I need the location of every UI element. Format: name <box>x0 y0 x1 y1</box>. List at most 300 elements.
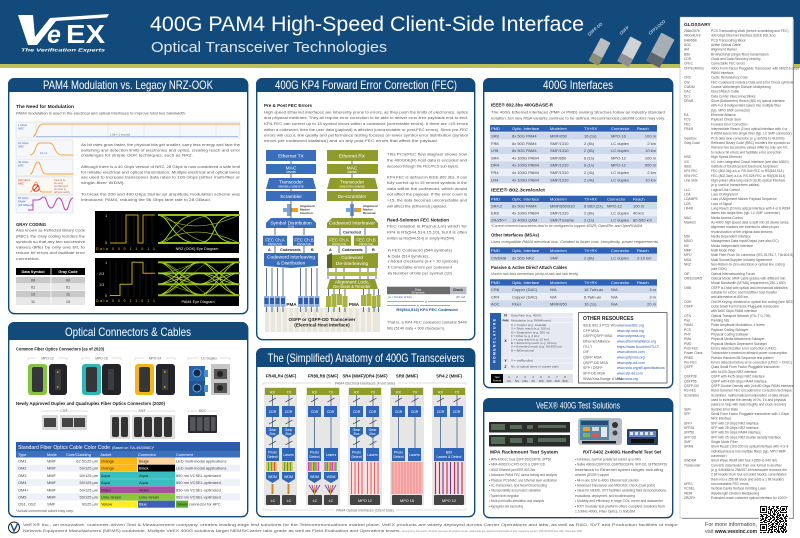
table: fiber optics cable color code: Connector <box>138 452 157 457</box>
glossary definitions: that any two successive values differ by only one bit, <box>711 146 788 150</box>
diagram: RX flow: Alignment Lock, <box>335 280 369 286</box>
table: 802.3cm/cn/ct interfaces: 100 m <box>633 204 645 208</box>
table: 802.3bs interfaces: SMF/1310 <box>550 163 569 168</box>
glossary terms: I2C <box>684 160 690 164</box>
glossary definitions: 2 bit header from four encoded blocks, consolidates <box>711 473 787 477</box>
table: fiber optics cable color code: MMF <box>47 458 56 464</box>
text: flow description: will affect the (Ethernet) payload. <box>387 203 447 208</box>
footnote: *Actual commercial colors may vary. <box>16 509 74 513</box>
column labels <box>266 374 462 378</box>
transceiver column: FR8/LR8: LC <box>313 499 318 503</box>
nomenclature example strip: 5 <box>540 375 542 379</box>
chart: bit rate waveforms: Cannot be <box>54 179 66 182</box>
label: electrical interfaces: PAM4 Electrical Interfaces (Front Side) <box>335 382 395 386</box>
list: RXT features: 1.5 MHz-400G, Fiber Optics, G.fin/DSM <box>575 510 635 514</box>
glossary definitions: Wavelength Division Multiplexing <box>711 491 759 495</box>
list: MPA features: • Multi-port traffic simulation and analysis <box>489 499 544 503</box>
table: direct attach cables: PMD <box>491 280 500 285</box>
table: 802.3bs interfaces: 2 (4λ) <box>584 170 595 175</box>
diagram: TX flow: Symbol Distribution <box>270 220 312 226</box>
glossary terms: AOC <box>684 43 692 47</box>
table: gray code <box>16 268 85 305</box>
table: 802.3bs interfaces: 2 km <box>647 170 657 175</box>
table: direct attach cables: N/A <box>550 294 557 299</box>
chart: bit rate waveforms: too slow to <box>54 188 67 191</box>
glossary terms: QSFP-DD <box>684 384 699 388</box>
transceiver column: SR8: MPO 16 <box>400 499 414 503</box>
table: 802.3cm/cn/ct interfaces: SMF/1310 <box>550 210 569 216</box>
transceiver column: SR4.2: CDR <box>453 410 461 414</box>
transceiver column: SR4/DR4 <box>348 387 382 505</box>
glossary definitions: PAM4 Interface <box>711 71 734 75</box>
glossary terms: PRBS <box>684 356 694 360</box>
glossary terms: DCI <box>684 94 690 98</box>
table: 802.3bs interfaces: FR4 <box>491 170 499 175</box>
table: gray code: 10 <box>66 300 70 304</box>
glossary terms: Post-FEC <box>684 347 699 351</box>
glossary terms: LLC <box>684 188 691 192</box>
diagram: TX flow: Codewords <box>280 248 301 252</box>
chart: bit rate waveforms: 40 Gbps <box>18 160 29 164</box>
glossary terms: 400GAUI-8 <box>684 34 701 38</box>
glossary definitions: Modal Bandwidth (MTMA) requirement (250-1,600) <box>711 281 786 285</box>
table: 802.3bs interfaces: 8x 50G PAM4 <box>512 148 537 153</box>
text: explanation of bit rates: are used to increase transceiver data rates to 100 Gbps (either multi-fiber or <box>81 175 241 180</box>
text: flow description <box>387 152 468 208</box>
glossary terms: Line Side <box>684 178 698 182</box>
glossary definitions: Payload Coding Sublayer <box>711 328 749 332</box>
transceiver column: SR4/DR4: RX <box>354 390 360 394</box>
other resources box: www.ieee802.org <box>617 324 644 328</box>
image: MPA rackmount units <box>489 422 570 446</box>
table: direct attach cables: MMF/850 <box>550 302 568 307</box>
connector: MPO-24 <box>135 356 175 395</box>
glossary definitions: Optical Internetworking Forum <box>711 272 755 276</box>
nomenclature box: S = Short reach (e.g. 100 m) <box>511 327 550 331</box>
text: explanation of bit rates: single-fiber WDM). <box>81 180 125 185</box>
chart: bit rate waveforms <box>16 122 240 213</box>
nomenclature example strip: 10G <box>522 379 529 383</box>
glossary terms: FEC <box>684 122 691 126</box>
table: 802.3cm/cn/ct interfaces: Reach <box>633 196 645 202</box>
transceiver column: FR4/LR4: LC <box>287 499 292 503</box>
glossary definitions: Long Reach (10 km) optical interface with 4 or 8 WDM <box>711 206 790 210</box>
text: company statement: Acronyms in this poster. All rights reserved. All product names, trademarks are registered trademarks of their respective owners. D05-00-054P Rev. A00, November 2020 <box>402 529 582 533</box>
transceiver column: FR8/LR8: LC <box>329 499 334 503</box>
table: direct attach cables: AOC <box>491 302 500 307</box>
chart: PAM4 eye diagram: 0 <box>105 294 107 298</box>
table: fiber optics cable color code: Aqua <box>101 473 111 478</box>
glossary terms: CW <box>684 80 690 84</box>
other resources box: www.qsfp-dd.com <box>617 361 645 365</box>
transceiver column: FR4/LR4: Lasers <box>283 453 294 457</box>
table: 802.3bs interfaces: 100 m <box>645 155 657 160</box>
table: fiber optics cable color code: Mode <box>47 452 57 457</box>
glossary terms: MDI <box>684 234 690 238</box>
diagram: transceiver host interface background <box>265 308 380 332</box>
table: fiber optics cable color code: MMF <box>47 480 56 485</box>
transceiver column: SR8: CDR <box>411 410 419 414</box>
subheading: 802.3bs <box>491 102 665 120</box>
transceiver column: FR4/LR4: TX <box>287 390 292 394</box>
glossary terms: QSFP <box>684 365 694 369</box>
chart: NRZ eye diagram <box>95 211 240 253</box>
glossary terms: LOA <box>684 192 691 196</box>
connector: MPO-16 <box>82 356 121 395</box>
nomenclature example strip: 7 <box>556 375 558 379</box>
nomenclature example strip: 5G <box>515 379 520 383</box>
table: 802.3bs interfaces: PMD <box>491 126 500 131</box>
diagram: TX flow: A <box>268 248 271 252</box>
panel: 400G KP4 forward error correction <box>256 78 475 340</box>
table: 802.3cm/cn/ct interfaces: MMF/850/910 <box>550 204 575 208</box>
table: direct attach cables: 16 (1λ) <box>584 302 597 307</box>
list: RXT features: evaluations, deployment, and troubleshooting <box>575 494 635 498</box>
glossary definitions: FEC Codeword; includes Data and Error Check symbols <box>711 80 794 84</box>
table: gray code: 11 <box>31 300 35 304</box>
glossary terms: Gearbox <box>684 136 697 140</box>
glossary definitions: (e.g. 64b/66b to 256/257-bit transcoder removes the <box>711 468 787 472</box>
connector: MPO-16: MPO-16 <box>95 356 108 360</box>
diagram: RX flow: De-interleaving <box>336 261 368 267</box>
glossary definitions: Single Mode Fiber <box>711 440 739 444</box>
connector: MDC: MDC <box>199 409 207 413</box>
image: RXT-6402 handheld test set <box>578 418 622 445</box>
diagram: RX flow: A <box>329 248 332 252</box>
glossary definitions: Extended-reach coherent optical interface for 100G+ <box>711 496 788 500</box>
text: Reed-Solomon FEC notation: FEC notation is RS(n,k,t,m) which for <box>387 223 468 228</box>
table: other interfaces <box>490 247 657 261</box>
glossary definitions: connector) <box>711 454 727 458</box>
glossary terms: CDR <box>684 57 692 61</box>
text: pre and post FEC errors <box>264 103 468 143</box>
heading: GLOSSARY <box>684 22 712 28</box>
list: MPA features: • Advanced PAM4 FEC stress testing and analysis <box>489 473 557 477</box>
text: pre and post FEC errors: High speed Ethernet interfaces are inherently prone to errors, as they push the limits of electronics, optics <box>264 109 468 114</box>
table: 802.3bs interfaces: Optic. Interface <box>512 126 540 131</box>
table: 802.3cm/cn/ct interfaces: PMD <box>491 196 500 202</box>
connector: LC duplex: LC-Duplex <box>201 356 217 360</box>
glossary terms: Power Class <box>684 351 703 355</box>
table: 802.3bs interfaces: FR8 <box>491 141 499 146</box>
nomenclature box: NOMENCLATURE <box>492 318 496 363</box>
text: explanation of bit rates: Although there is a 40 Gbps version of NRZ, 28 Gbps is now considered a safe limit <box>81 164 241 169</box>
glossary terms: EA <box>684 113 689 117</box>
glossary terms: ZR/ZR+ <box>684 496 696 500</box>
glossary terms: Gray Code <box>684 141 700 145</box>
column labels: SR4.2 (MMF) <box>436 374 462 378</box>
text: gray coding: values differ by only one bit, to <box>16 244 86 250</box>
glossary terms: BiDi <box>684 52 690 56</box>
transceiver photos: QSFP-DD <box>586 21 604 37</box>
glossary definitions: FEC (802.3bj) a.k.a. RS-544 FEC or RS(544,514) <box>711 169 784 173</box>
chart: bit rate waveforms: 0.1 ns <box>40 151 48 155</box>
table: 802.3cm/cn/ct interfaces: 40 km <box>633 210 645 216</box>
nomenclature box: F = Fiber (e.g. 2 km) <box>511 334 539 338</box>
table: fiber optics cable color code: 850 nm VCSEL-optimized <box>176 473 221 478</box>
diagram: RS(544,514) codeword: 514 symbols <box>412 292 425 294</box>
diagram: RX flow <box>326 150 380 312</box>
text: flow description: fully correct up to 15 errored symbols in the <box>387 180 468 185</box>
nomenclature box: E = Extra long reach (e.g. 40 km) <box>511 341 556 345</box>
table: other interfaces: LC duplex <box>611 255 629 260</box>
table: fiber optics cable color code: MMF <box>47 487 56 492</box>
table: other interfaces: 2-10 km <box>637 255 652 260</box>
table: fiber optics cable color code: 50/125 µm <box>80 473 98 478</box>
logo: VeEX <box>18 14 109 52</box>
diagram: TX flow <box>263 150 320 312</box>
glossary definitions: Optical Mode: MMF cable grades with different min. <box>711 277 786 281</box>
glossary terms: CFP8 (400G) <box>684 66 704 70</box>
glossary definitions: and alternative at 800 km <box>711 295 748 299</box>
diagram: RS(544,514) codeword: k <box>417 304 419 308</box>
table: 802.3bs interfaces: 8 (1λ) <box>584 163 595 168</box>
nomenclature example strip: 2G <box>507 379 512 383</box>
list: MPA features: • MPA-400DCO-CFP2-DCO & QSFP-DD <box>489 463 545 467</box>
glossary definitions: with 4x100 Gbps NRZ interface <box>711 370 757 374</box>
nomenclature box: No. of optical lanes or copper pairs <box>511 364 559 368</box>
glossary terms: KR4 FEC <box>684 174 699 178</box>
other resources box: OIF <box>583 350 590 354</box>
table: 802.3bs interfaces: TX+RX <box>584 126 597 131</box>
table: other interfaces: SMF <box>550 255 559 260</box>
transceiver column: SR8: Detect <box>393 455 404 459</box>
text: flow description: This PCS/FEC flow diagram shows how <box>387 152 467 157</box>
table: 802.3cm/cn/ct interfaces: ER8 <box>491 210 500 216</box>
table: fiber optics cable color code: 62.5/125 µm <box>76 458 98 464</box>
diagram: RX flow: Removal <box>363 211 376 215</box>
glossary definitions: QSFP with 4x50 Gbps PAM4 interface <box>711 379 767 383</box>
table: direct attach cables: Fiber <box>512 302 522 307</box>
glossary definitions: PCS Transcoding Block <box>711 38 746 42</box>
list: RXT features: • All-in-one 10M to 400G Ethernet test solution <box>575 478 639 482</box>
glossary definitions: QSFP Double Density with 2x4x50 Gbps PAM4 interface <box>711 384 794 388</box>
caption: RXT handheld: RXT-6402 2x400G Handheld Test Set <box>583 450 661 456</box>
table: direct attach cables: N/A <box>611 294 618 299</box>
diagram: TX flow: FEC Ch.B <box>294 238 314 242</box>
chart: bit rate waveforms: 1 Gbps <box>18 123 28 127</box>
table: fiber optics cable color code: Green <box>177 502 188 507</box>
other resources box: www.snia.org <box>617 377 638 381</box>
transceiver column: FR8/LR8: CDR <box>311 410 319 414</box>
glossary definitions: (e.g. used in transceivers cables) <box>711 183 759 187</box>
glossary definitions: NRZ interface <box>711 417 732 421</box>
table: direct attach cables: 20 m <box>647 302 657 307</box>
text: flow description: data within the codeword, which would <box>387 186 467 191</box>
subheading: newly approved connectors: Newly Approved Duplex and Quadruplex Fiber Optics Connectors (2020) <box>16 401 165 406</box>
chart: bit rate waveforms: NRZ <box>18 144 24 148</box>
diagram: RS(544,514) codeword: (m = Number of bits) <box>388 295 412 299</box>
connector: SN: SN® <box>138 409 146 413</box>
glossary definitions: SFP with 25 Gbps NRZ interface <box>711 426 759 430</box>
table: 802.3cm/cn/ct interfaces: 2 (8λ) <box>584 210 595 216</box>
other resources box: SFP / DSFP <box>583 366 603 370</box>
text: pre and post FEC errors: within a codeword, then the user data (payload) is affected (uncorrectable or post-FEC errors). Since pre-FEC <box>264 127 468 132</box>
table: direct attach cables: Copper (DAC) <box>512 287 538 292</box>
table: 802.3bs interfaces: 8x 50G PAM4 <box>512 134 537 138</box>
table: fiber optics cable color code: LED multi-modal applications <box>176 466 226 471</box>
chart: NRZ eye diagram: 0 <box>105 240 108 245</box>
label: optical interfaces <box>263 507 466 512</box>
nomenclature box: Data Rate (e.g. 400G) <box>511 313 541 317</box>
table: 802.3cm/cn/ct interfaces: LC duplex <box>611 218 629 222</box>
glossary terms: Transcoder <box>684 463 701 467</box>
table: fiber optics cable color code: Type <box>18 452 26 457</box>
transceiver column: SR4.2: RX <box>438 390 444 394</box>
table: fiber optics cable color code: 850 nm VCSEL-optimized <box>176 487 221 492</box>
list: MPA features: • IC, transceiver, and Near/Cloud testing <box>489 484 547 488</box>
glossary terms: PMA <box>684 337 692 341</box>
list: RXT features: • Native 400GE/QSFP-DD, QSFP56/OSFP4, SFP-DD, SFP56/SFP28 <box>575 463 667 467</box>
other resources box: ITU-T <box>583 345 593 349</box>
table: direct attach cables: TX+RX <box>584 280 597 285</box>
transceiver column: FR4/LR4: LC <box>271 499 276 503</box>
table: fiber optics cable color code: LED multi-modal applications <box>176 458 226 464</box>
other resources box: www.ethernetalliance.org <box>617 340 656 344</box>
transceiver column: FR8/LR8: Photo <box>310 450 319 454</box>
chart: bit rate waveforms: 10 Gbps <box>18 141 29 145</box>
text: pre and post FEC errors: KP4-FEC can correct up to 15 symbol errors within a codeword (correctable errors). If there are >15 errors <box>264 121 468 126</box>
label: optical interfaces: PAM4 Optical Interfaces (Client Side) <box>336 508 394 512</box>
nomenclature box: V = via/Bundled <box>511 358 533 362</box>
table: fiber optics cable color code: (Based on TIA-492/598C)* <box>112 446 155 450</box>
table: 802.3bs interfaces: 4x 100G PAM4 <box>512 177 540 182</box>
table: 802.3bs interfaces: SMF/1310 <box>550 170 569 175</box>
glossary terms: PMD <box>684 342 692 346</box>
chart: PAM4 eye diagram <box>95 258 240 306</box>
glossary definitions: Quad Small Form Factor Pluggable transceiver <box>711 365 781 369</box>
table: fiber optics cable color code: Beige <box>139 458 149 464</box>
text: explanation of bit rates: switching and detection limits of electronics and optics, creating reach and error <box>81 147 241 152</box>
text: Reed-Solomon FEC notation: Reed-Solomon FEC Notation <box>387 218 449 222</box>
connector: SN <box>110 409 175 439</box>
table: 802.3cm/cn/ct interfaces: 4x 100G PAM4 <box>512 210 540 216</box>
table: fiber optics cable color code: Orange <box>101 458 114 464</box>
table: fiber optics cable color code: Standard Fiber Optics Cable Color Code <box>18 445 110 451</box>
table: fiber optics cable color code: Orange <box>101 466 114 471</box>
nomenclature box: Z = Extended reach (e.g. 80-500 km) <box>511 345 562 349</box>
diagram: RS(544,514) codeword: (30, sw) <box>456 295 465 299</box>
glossary terms: MII <box>684 244 689 248</box>
connector: MPO-24: MPO-24 <box>149 356 161 360</box>
table: fiber optics cable color code: Blue <box>139 502 147 507</box>
other resources box: www.snia.org/sff-specifications <box>617 366 665 370</box>
diagram: TX flow: RS(544,514) <box>297 243 311 246</box>
subheading: 802.3bs: IEEE® 802.3bs 400GBASE-R <box>491 102 554 108</box>
diagram: RX flow: B <box>372 248 375 252</box>
nomenclature box <box>490 313 573 370</box>
text: Reed-Solomon FEC notation: k Data (514 symbols) <box>388 253 429 258</box>
heading: 400G Interfaces <box>543 78 613 92</box>
diagram: RS(544,514) codeword: Check <box>453 288 463 292</box>
glossary terms: PHY <box>684 333 692 337</box>
nomenclature box: C = Copper (e.g. Coaxial) <box>511 323 546 327</box>
text: explanation of bit rates <box>81 142 241 202</box>
table: 802.3cm/cn/ct interfaces: 8x 50G PAM4 <box>512 204 537 208</box>
table: fiber optics cable color code: Aqua <box>139 473 149 478</box>
nomenclature example strip: 1 <box>508 375 510 379</box>
other resources box: SFP-DD MSA <box>583 372 606 376</box>
transceiver column: SR4/DR4: Detect <box>351 455 362 459</box>
text: codeword size: bits (5140 data + 300 checksum). <box>387 325 445 330</box>
glossary terms: SER <box>684 407 691 411</box>
nomenclature example strip: Year <box>494 375 500 379</box>
diagram: RX flow: FEC Ch.B <box>356 238 376 242</box>
glossary terms: OM5 <box>684 286 691 290</box>
glossary definitions: Coarse Wavelength Division Multiplexing <box>711 85 771 89</box>
transceiver column: SR4/DR4: CDR <box>353 410 361 414</box>
glossary definitions: Alignment Marker <box>711 48 738 52</box>
connector: MDC <box>188 409 217 433</box>
text: flow description: KP4 FEC is defined in IEEE 802.3bs. It can <box>387 174 467 179</box>
glossary definitions: Uncorrectable FEC errors <box>711 482 749 486</box>
chart: PAM4 eye diagram: 2/3 <box>99 272 104 276</box>
chart: bit rate waveforms: too little and <box>54 185 68 188</box>
connector: MPO-12: MPO-12 <box>41 356 54 360</box>
table: 802.3bs interfaces: SMF/1310 <box>550 148 569 153</box>
connector: LC duplex <box>188 356 230 396</box>
transceiver column: FR4/LR4: Gear <box>285 428 293 432</box>
table: 802.3bs interfaces: 100 m <box>645 134 657 138</box>
diagram: TX flow: FEC Ch.A <box>265 238 285 242</box>
table: 802.3bs interfaces: 2 (8λ) <box>584 141 595 146</box>
table: fiber optics cable color code: Lime Green <box>101 494 121 500</box>
chart: NRZ eye diagram: NRZ (OOK) Eye Diagram <box>176 247 218 251</box>
chart: bit rate waveforms: too long, <box>54 182 64 185</box>
glossary definitions: Bi-directional (single fiber) transmission <box>711 52 769 56</box>
transceiver column: FR8/LR8: RX <box>312 390 318 394</box>
glossary definitions: SFP with 10 Gbps NRZ interface <box>711 421 759 425</box>
diagram: RX flow: MAC <box>347 166 358 172</box>
table: 802.3bs interfaces: 2 km <box>647 141 657 146</box>
table: fiber optics cable color code: Lime Green <box>139 494 159 500</box>
glossary definitions: Ethernet Alliance <box>711 113 736 117</box>
transceiver column: SR8: Photo <box>394 450 403 454</box>
text: gray coding: (RBC), the Gray coding reorders the <box>16 234 86 238</box>
glossary definitions: reconstruction of the original data streams <box>711 230 773 234</box>
glossary terms: OSFP <box>684 305 694 309</box>
logo: VeEX: The Verification Experts <box>21 48 106 52</box>
diagram: RX flow: Marker <box>363 208 374 212</box>
table: 802.3bs interfaces: MMF/850 <box>550 134 568 138</box>
table: 802.3bs interfaces: Mode/nm <box>550 126 567 131</box>
table: fiber optics cable color code: 850 nm VCSEL-optimized <box>176 480 221 485</box>
table: fiber optics cable color code: Black <box>139 466 149 471</box>
glossary definitions: Pulse Amplitude Modulation, 4 levels <box>711 323 765 327</box>
diagram: TX flow: Alignment <box>300 204 315 208</box>
glossary definitions: Small Form Factor Pluggable transceiver with 1 Gbps <box>711 412 789 416</box>
transceiver photos: OSFP <box>618 25 630 36</box>
glossary terms: NRZ <box>684 262 691 266</box>
table: 802.3bs interfaces: 4x 100G PAM4 <box>512 163 540 168</box>
transceiver photos <box>586 19 675 68</box>
glossary terms: MMF <box>684 248 692 252</box>
table: 802.3bs interfaces: 8x 50G PAM4 <box>512 141 537 146</box>
nomenclature example strip: 2 <box>516 375 518 379</box>
nomenclature example strip: 400 <box>554 379 560 383</box>
glossary terms: PCS <box>684 328 692 332</box>
table: fiber optics cable color code: 9/125 µm <box>82 502 98 507</box>
label: PMA (RX): PMA <box>349 302 360 307</box>
glossary definitions: 400G Form Factor Pluggable Transceiver with NRZ/16 Gbps <box>711 66 800 70</box>
glossary definitions: Short (Datacenter) Reach (500 m) optical interface <box>711 99 785 103</box>
text: the need for modulation <box>16 104 186 116</box>
chart: bit rate waveforms: NRZ <box>18 126 24 130</box>
table: 802.3cm/cn/ct interfaces: MPO-12 <box>607 204 623 208</box>
subheading: common connectors: Common Fiber Optics Connectors (as of 2020) <box>16 346 104 352</box>
table: fiber optics cable color code: 50/125 µm <box>80 494 98 500</box>
table: 802.3bs interfaces: LC duplex <box>611 170 629 175</box>
